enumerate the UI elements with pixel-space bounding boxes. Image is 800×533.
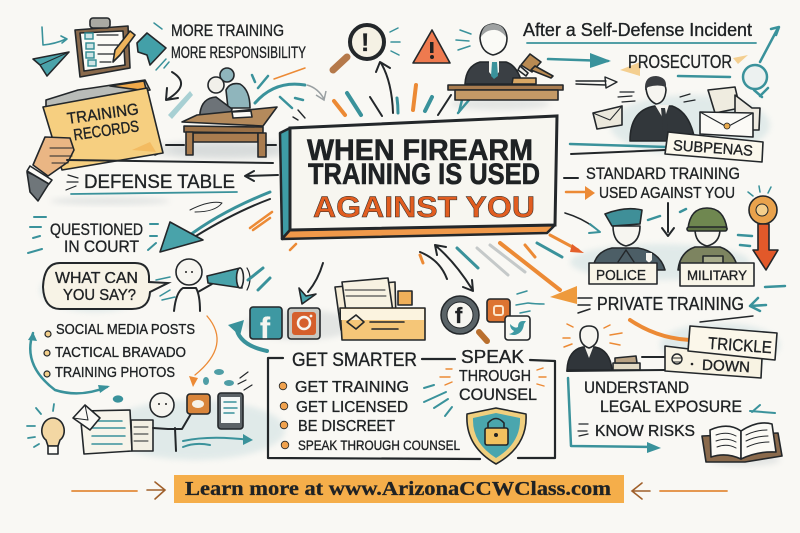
icon: soldier: [678, 208, 738, 270]
heading: speak through counsel: [424, 347, 546, 416]
title panel: [280, 116, 557, 239]
arrow: title to police: [565, 209, 752, 246]
heading: more training more responsibility: MORE TRAINING: [171, 21, 284, 40]
arrow: curved black: [166, 72, 181, 100]
footer banner: [72, 475, 727, 503]
label: military: MILITARY: [687, 267, 748, 283]
icon: training records folder: [43, 80, 163, 170]
heading: questioned in court: QUESTIONED: [50, 220, 143, 239]
label: trickle down: DOWN: [702, 357, 750, 376]
heading: get smarter: GET SMARTER: [292, 350, 417, 371]
label: subpenas: [570, 132, 763, 162]
right arrow: [632, 483, 727, 499]
icon: padlock shield: [467, 408, 526, 464]
list: social media risks: TACTICAL BRAVADO: [55, 344, 186, 361]
label: training records: RECORDS: [72, 118, 140, 144]
heading: more training more responsibility: [171, 21, 306, 62]
list: social media risks: TRAINING PHOTOS: [55, 364, 175, 381]
heading: private training: PRIVATE TRAINING: [597, 294, 744, 314]
icon: central file folder: [335, 278, 425, 340]
icon: documents and envelope: [73, 405, 153, 454]
heading: questioned in court: [28, 217, 158, 256]
icon: teal bookmark: [137, 23, 169, 70]
speech bubble: what can you say: [43, 263, 168, 309]
bullets: [44, 331, 51, 377]
heading: more training more responsibility: MORE RESPONSIBILITY: [171, 43, 306, 62]
label: training records: [66, 101, 142, 145]
checklist: GET TRAINING: [295, 379, 409, 396]
label: police: POLICE: [596, 267, 646, 284]
heading: questioned in court: IN COURT: [64, 237, 139, 256]
arrow: large teal to questioned in court: [160, 192, 270, 252]
list: social media risks: SOCIAL MEDIA POSTS: [56, 321, 195, 338]
icon: teal magnifier: [743, 27, 779, 97]
arrow: teal swoosh to social icons: [228, 320, 267, 351]
icon: social tiles: [487, 291, 544, 340]
heading: understand legal exposure: UNDERSTAND: [584, 378, 689, 397]
icon: medal and orange arrow: [748, 186, 778, 270]
icon: figure with megaphone: [156, 259, 250, 311]
heading: standard training used against you: USED AGAINST YOU: [599, 185, 735, 202]
heading: prosecutor: [548, 52, 748, 77]
icon: instagram tile: [288, 308, 320, 339]
icon: police officer: [593, 209, 665, 270]
panel: get smarter: [268, 350, 555, 459]
arrow: black outline: [576, 77, 617, 88]
heading: standard training used against you: [564, 164, 740, 202]
arrows: orange from title panel: [248, 212, 584, 304]
icon: envelopes: [593, 87, 760, 137]
checklist: [279, 379, 460, 453]
heading: speak through counsel: THROUGH: [459, 368, 531, 385]
icon: prosecutor figure: [618, 76, 695, 141]
icon: clipboard with pencil: [75, 18, 135, 77]
label: training records: TRAINING: [66, 101, 140, 128]
speech bubble: what can you say: WHAT CAN: [55, 270, 138, 287]
title text: [307, 134, 540, 224]
arrow: teal swoosh from table: [168, 68, 326, 120]
icon: lightbulb: [27, 404, 64, 454]
heading: standard training used against you: STANDARD TRAINING: [586, 164, 740, 183]
decorative washes: [40, 95, 780, 466]
checklist: SPEAK THROUGH COUNSEL: [298, 438, 460, 453]
icon: facebook tile: f: [260, 312, 271, 345]
arrow: thin orange curve: [189, 316, 217, 387]
heading: speak through counsel: COUNSEL: [459, 385, 537, 404]
icon: hand holding folder: [27, 137, 74, 201]
icon: judge at bench: [448, 24, 563, 100]
heading: private training: [578, 286, 785, 314]
speech bubble: what can you say: YOU SAY?: [63, 287, 136, 304]
arrow: down to police and military: [662, 203, 674, 236]
arrow: teal loop around list: [28, 332, 110, 393]
icon: facebook magnifier: [441, 296, 487, 341]
label: trickle down: TRICKLE: [707, 334, 773, 357]
left arrow: [72, 482, 165, 499]
arrow: double headed to folder and magnifier: [435, 245, 473, 291]
heading: understand legal exposure: [584, 378, 775, 416]
icon: check arrow and paper plane: [33, 27, 69, 76]
icon: defense table with two people: [67, 68, 280, 163]
arrow: teal arrow into social icons: [299, 263, 323, 304]
icon: warning triangle: [413, 30, 450, 63]
title text: AGAINST YOU: [313, 191, 535, 224]
3d side faces: [280, 128, 555, 239]
icon: magnifier with alert: [333, 25, 400, 70]
icon: facebook tile: [250, 307, 282, 345]
label: police: [589, 263, 657, 284]
checklist: BE DISCREET: [298, 418, 395, 435]
list: social media risks: [44, 321, 195, 381]
checklist: GET LICENSED: [296, 399, 408, 416]
icon: open book: [702, 423, 782, 462]
text: know risks with L arrow: [568, 378, 695, 453]
footer banner: Learn more at www.ArizonaCCWClass.com: [185, 478, 611, 500]
heading: understand legal exposure: LEGAL EXPOSURE: [600, 397, 742, 416]
heading: prosecutor: PROSECUTOR: [628, 52, 732, 72]
title text: TRAINING IS USED: [308, 158, 540, 191]
arrow: trickle curve: [630, 316, 753, 346]
label: defense table: DEFENSE TABLE: [84, 172, 235, 193]
icon: facebook magnifier: f: [455, 303, 463, 328]
icon: magnifier with alert: !: [361, 29, 369, 57]
arrow: title to defense table: [245, 171, 278, 181]
heading: after a self-defense incident: After a Self-Defense Incident: [523, 20, 752, 40]
label: subpenas: SUBPENAS: [672, 137, 753, 160]
title text: WHEN FIREARM: [307, 134, 533, 167]
icon: attorney at desk: [563, 324, 665, 371]
text: know risks with L arrow: KNOW RISKS: [595, 423, 695, 440]
icon: figure with social post and phone: [113, 369, 253, 451]
label: trickle down: [665, 326, 777, 378]
arrow: up to magnifier: [376, 62, 398, 113]
decorative burst strokes above title: [334, 85, 469, 116]
label: military: [680, 263, 754, 286]
heading: speak through counsel: SPEAK: [461, 347, 524, 367]
